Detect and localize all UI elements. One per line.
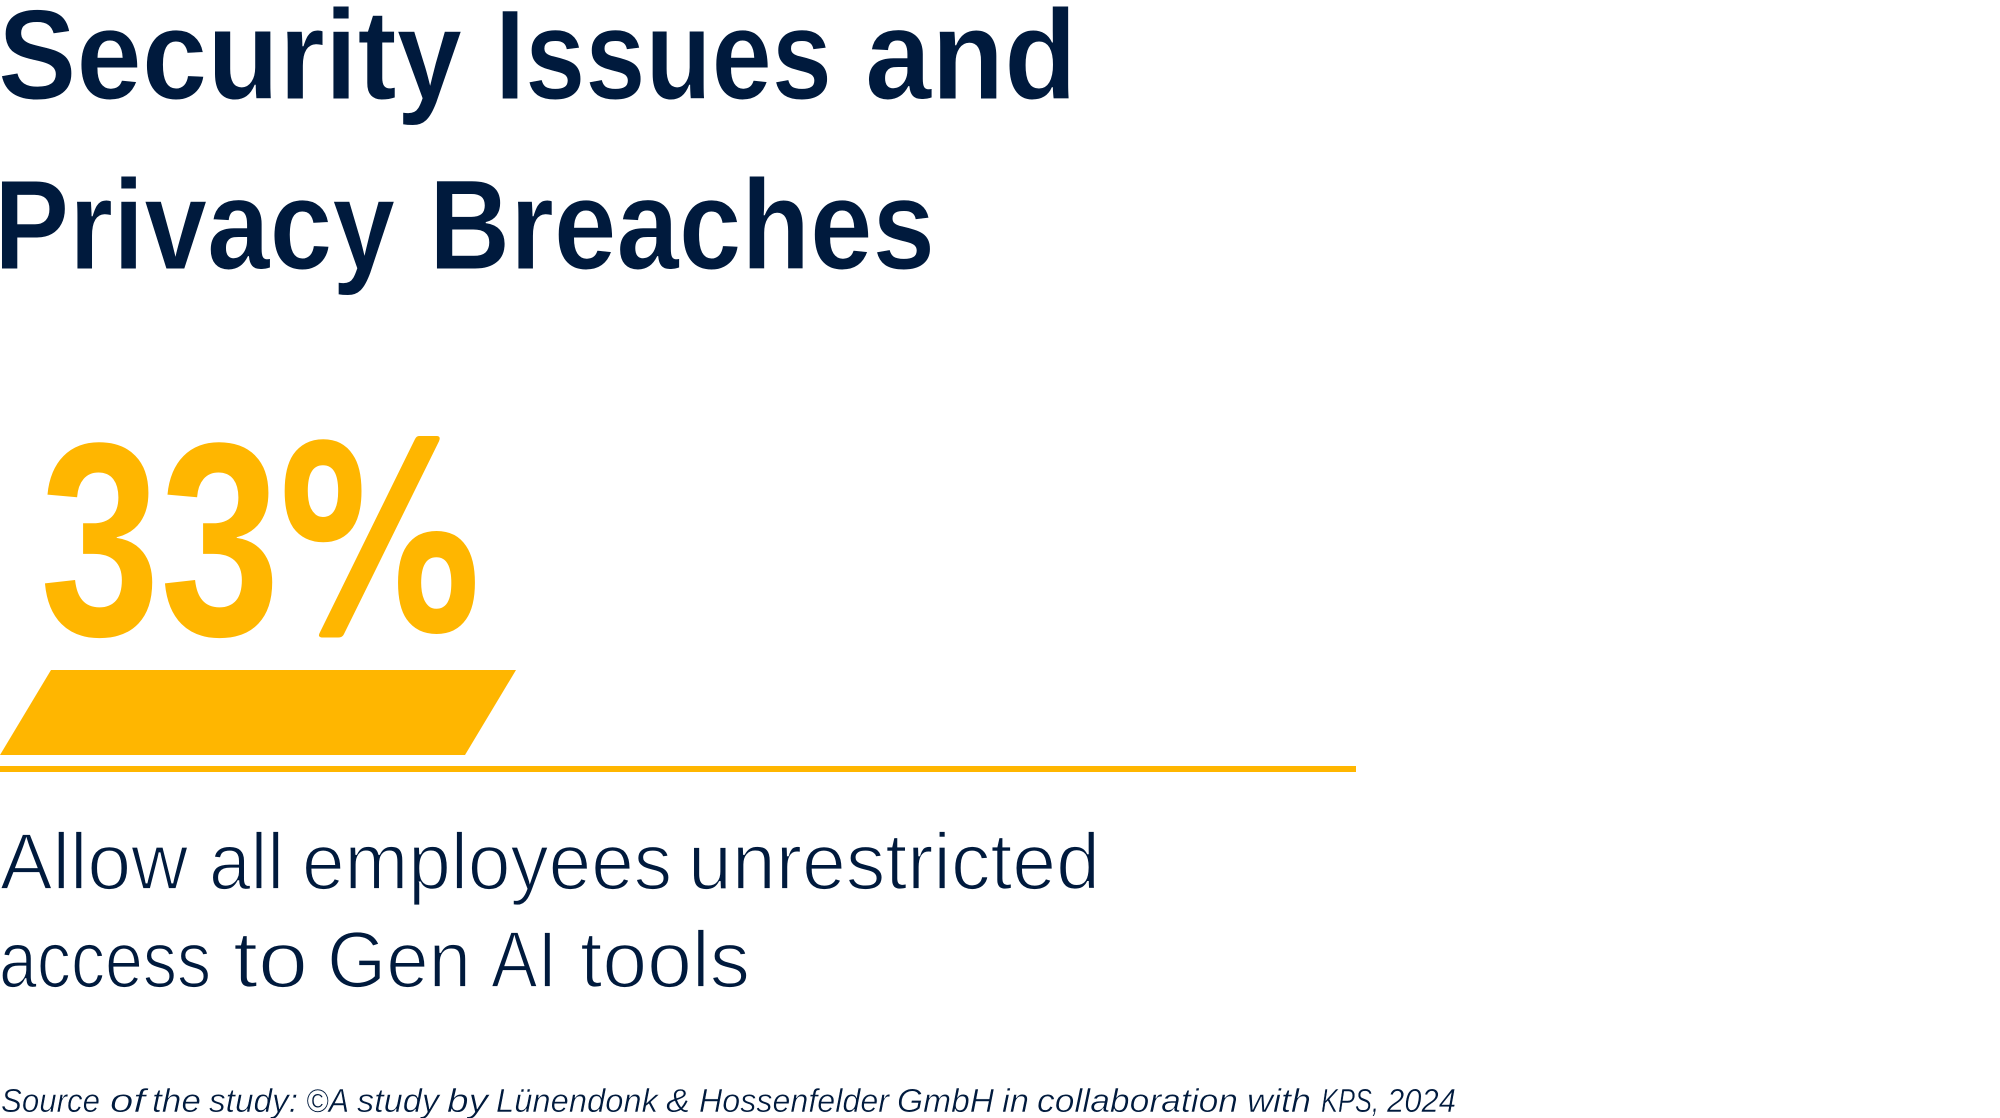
description text: employees xyxy=(302,817,672,906)
description text: all xyxy=(209,817,284,906)
source note: by xyxy=(447,1082,491,1118)
description text: Allow xyxy=(0,817,188,906)
source note: Source xyxy=(1,1082,100,1118)
statistic: 33% xyxy=(40,386,500,694)
source note: with xyxy=(1247,1082,1311,1118)
statistic: 33%: 33 xyxy=(40,386,280,694)
source note: study: xyxy=(209,1082,298,1118)
source note: Lünendonk xyxy=(496,1082,659,1118)
title: Breaches xyxy=(429,154,935,297)
description text: to xyxy=(233,915,308,1004)
bar: 33% parallelogram xyxy=(0,670,516,755)
title: Privacy xyxy=(0,154,395,297)
source note: of xyxy=(110,1082,150,1118)
source note: KPS, xyxy=(1321,1082,1379,1118)
title xyxy=(0,0,1077,297)
source note: the xyxy=(152,1082,201,1118)
description text: AI xyxy=(491,915,557,1004)
statistic: 33%: % xyxy=(260,424,500,671)
description text: tools xyxy=(580,915,750,1004)
description text: Gen xyxy=(327,915,471,1004)
source note: ©A xyxy=(306,1082,349,1118)
source note: in xyxy=(1002,1082,1029,1118)
source note: GmbH xyxy=(897,1082,994,1118)
axis line xyxy=(0,766,1356,772)
source note xyxy=(1,1082,1456,1118)
description text: unrestricted xyxy=(688,817,1100,906)
description text xyxy=(0,817,1100,1004)
source note: 2024 xyxy=(1386,1082,1456,1118)
source note: Hossenfelder xyxy=(699,1082,891,1118)
source note: & xyxy=(666,1082,690,1118)
source note: study xyxy=(357,1082,442,1118)
source note: collaboration xyxy=(1037,1082,1238,1118)
description text: access xyxy=(0,915,211,1004)
